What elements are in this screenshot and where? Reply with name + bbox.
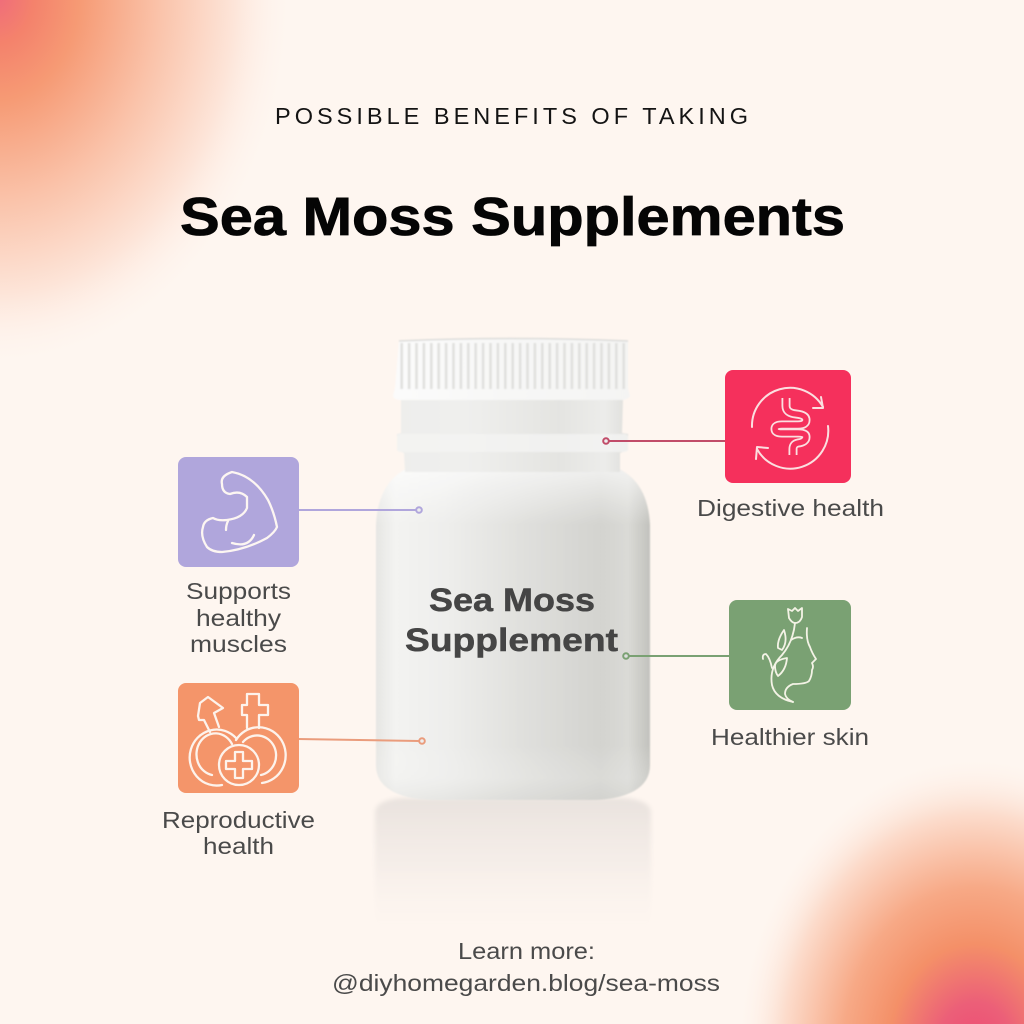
title: Sea Moss Supplements [180,187,845,247]
icon: muscles [178,457,299,567]
connector: skin [623,653,730,659]
label: reproductive health: health [203,833,274,859]
label: supports healthy muscles [186,578,291,657]
icon: healthier skin [729,600,851,710]
label: digestive health: Digestive health [697,495,884,521]
learn more: Learn more: [458,938,595,964]
connector: reproductive [298,738,425,744]
bottle reflection [375,798,651,945]
bottle cap [393,338,630,400]
label: healthier skin: Healthier skin [711,724,869,750]
label: supports healthy muscles: muscles [190,631,287,657]
bottle body [376,468,650,800]
bottle neck [397,398,628,472]
label: reproductive health [162,807,315,859]
icon: reproductive [178,683,299,793]
bottle label: Supplement [405,622,618,658]
icon: digestive [725,370,851,483]
label: reproductive health: Reproductive [162,807,315,833]
bottle [376,338,650,800]
label: supports healthy muscles: Supports [186,578,291,604]
connector: digestive [603,438,726,444]
learn more [332,938,720,996]
bottle label: Sea Moss [429,582,595,618]
bottle label [405,582,618,658]
learn more: @diyhomegarden.blog/sea-moss [332,970,720,996]
subtitle: POSSIBLE BENEFITS OF TAKING [275,103,748,129]
connector: muscles [298,507,422,513]
label: supports healthy muscles: healthy [196,605,282,631]
